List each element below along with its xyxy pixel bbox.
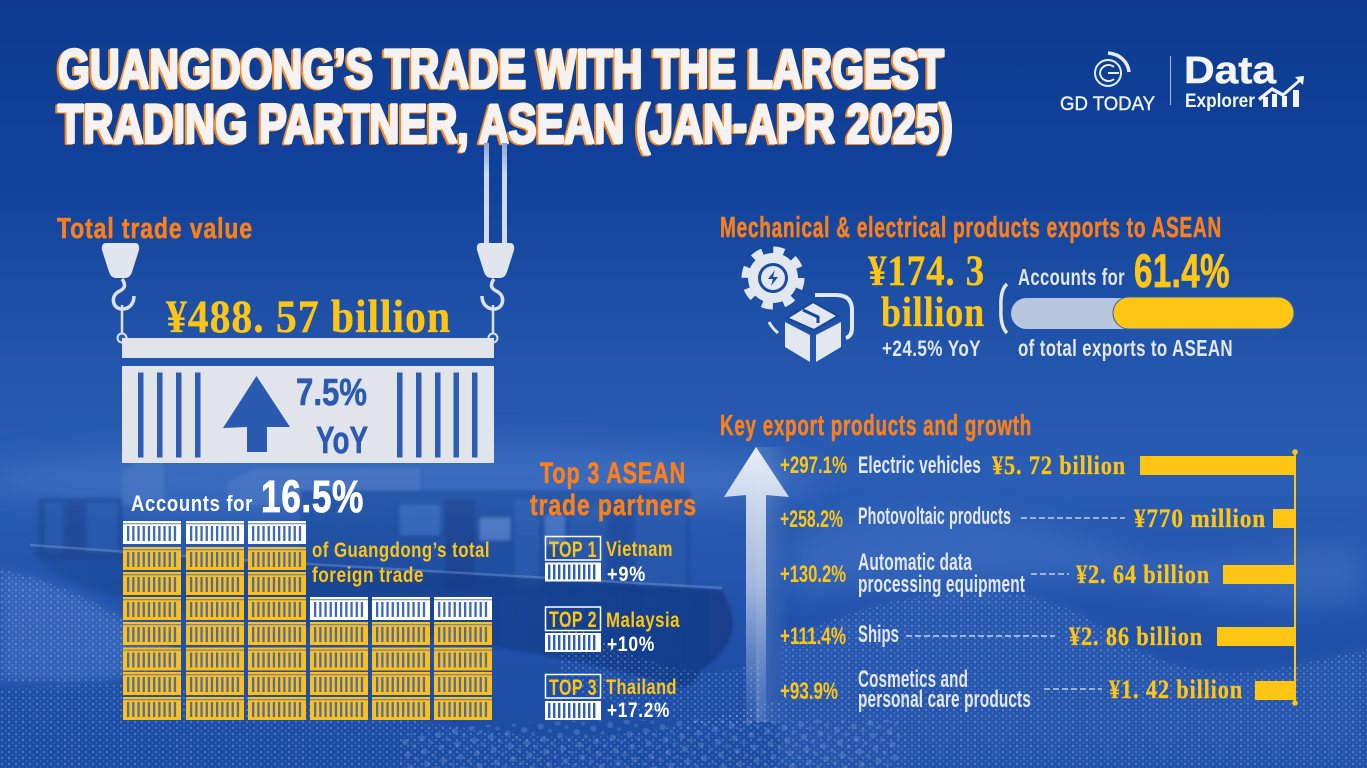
partner: Vietnam: Vietnam	[606, 538, 673, 561]
heading: top 3: trade partners	[530, 489, 697, 522]
title: TRADING PARTNER, ASEAN (JAN-APR 2025)	[58, 92, 953, 154]
row: cosmetics and personal care products	[780, 666, 1295, 713]
row: cosmetics and personal care products: ¥1. 42 billion	[1109, 675, 1243, 704]
row: automatic data processing equipment	[780, 549, 1295, 598]
logo: GD Today and Data Explorer: Data	[1184, 50, 1277, 92]
row: cosmetics and personal care products: Cosmetics and	[858, 666, 968, 693]
container top beam	[122, 338, 494, 358]
partner: Malaysia	[545, 607, 680, 656]
share of foreign trade: of Guangdong’s total	[312, 539, 490, 562]
panel: top 3 ASEAN trade partners	[530, 457, 697, 722]
total value: ¥488. 57 billion	[166, 291, 451, 343]
crane lifting container	[102, 143, 514, 463]
row: photovoltaic products	[780, 503, 1295, 533]
export bars chart	[780, 449, 1298, 713]
share of foreign trade	[123, 471, 492, 720]
row: automatic data processing equipment: ¥2. 64 billion	[1076, 560, 1210, 589]
export value: +24.5% YoY	[882, 336, 981, 361]
row: photovoltaic products: ¥770 million	[1134, 504, 1266, 533]
partner: Thailand: TOP 3	[549, 675, 597, 700]
heading: top 3: Top 3 ASEAN	[540, 457, 686, 490]
container body with growth: 7.5%	[296, 372, 367, 414]
row: photovoltaic products: +258.2%	[780, 506, 843, 533]
ship superstructure	[38, 462, 690, 594]
row: ships: +111.4%	[780, 623, 846, 650]
row: ships: Ships	[858, 621, 899, 648]
axis	[1292, 449, 1298, 706]
container stack chart	[123, 521, 492, 720]
partner: Thailand	[545, 674, 677, 722]
wave streaks	[0, 570, 173, 683]
share of foreign trade: foreign trade	[312, 564, 424, 587]
row: automatic data processing equipment: Automatic data	[858, 549, 972, 576]
partner: Vietnam	[545, 536, 673, 586]
partner: Thailand: Thailand	[606, 676, 677, 699]
right hook	[477, 243, 514, 342]
row: electric vehicles: ¥5. 72 billion	[992, 451, 1126, 480]
icon: gear and parcel	[745, 250, 852, 362]
export value: ¥174. 3	[868, 248, 985, 295]
share bar: 61.4 percent: of total exports to ASEAN	[1018, 335, 1233, 361]
heading: top 3	[530, 457, 697, 522]
share bar: 61.4 percent: Accounts for	[1018, 264, 1125, 290]
partner: Malaysia: TOP 2	[549, 607, 597, 632]
row: cosmetics and personal care products: personal care products	[858, 686, 1031, 713]
icon: up arrow	[223, 376, 290, 452]
arrow: growth ranking	[724, 447, 790, 722]
heading: key export products: Key export products and growth	[720, 410, 1032, 442]
container body with growth: YoY	[316, 420, 368, 462]
container body with growth	[122, 366, 494, 463]
row: electric vehicles	[780, 451, 1295, 480]
crane cables	[484, 143, 507, 246]
title: GUANGDONG’S TRADE WITH THE LARGEST	[58, 38, 944, 100]
export value: billion	[881, 290, 985, 336]
icon: GD Today mark	[1095, 53, 1129, 86]
logo: GD Today and Data Explorer	[1060, 50, 1304, 115]
partner: Vietnam: +9%	[607, 563, 646, 586]
row: automatic data processing equipment: processing equipment	[858, 571, 1025, 598]
heading: total trade value: Total trade value	[57, 213, 253, 245]
row: automatic data processing equipment: +130.2%	[780, 561, 846, 588]
share of foreign trade: Accounts for	[131, 491, 253, 516]
row: cosmetics and personal care products: +93.9%	[780, 678, 838, 705]
share bar: 61.4 percent: 61.4%	[1134, 244, 1230, 297]
row: photovoltaic products: Photovoltaic products	[858, 503, 1011, 530]
partner: Thailand: +17.2%	[607, 699, 670, 722]
logo: GD Today and Data Explorer: Explorer	[1185, 91, 1256, 112]
export value	[868, 248, 985, 361]
partner: Malaysia: +10%	[607, 633, 655, 656]
row: ships	[780, 621, 1295, 651]
row: ships: ¥2. 86 billion	[1069, 622, 1203, 651]
row: electric vehicles: Electric vehicles	[858, 452, 981, 479]
share of foreign trade: 16.5%	[261, 471, 364, 522]
icon: rising bars	[1258, 76, 1304, 107]
partner: Malaysia: Malaysia	[606, 609, 680, 632]
share bar: 61.4 percent	[1001, 244, 1294, 361]
row: electric vehicles: +297.1%	[780, 452, 847, 479]
title	[58, 38, 953, 154]
left hook	[102, 243, 139, 342]
ship hull	[30, 547, 733, 687]
logo: GD Today and Data Explorer: GD TODAY	[1060, 94, 1155, 115]
partner: Vietnam: TOP 1	[549, 537, 597, 562]
